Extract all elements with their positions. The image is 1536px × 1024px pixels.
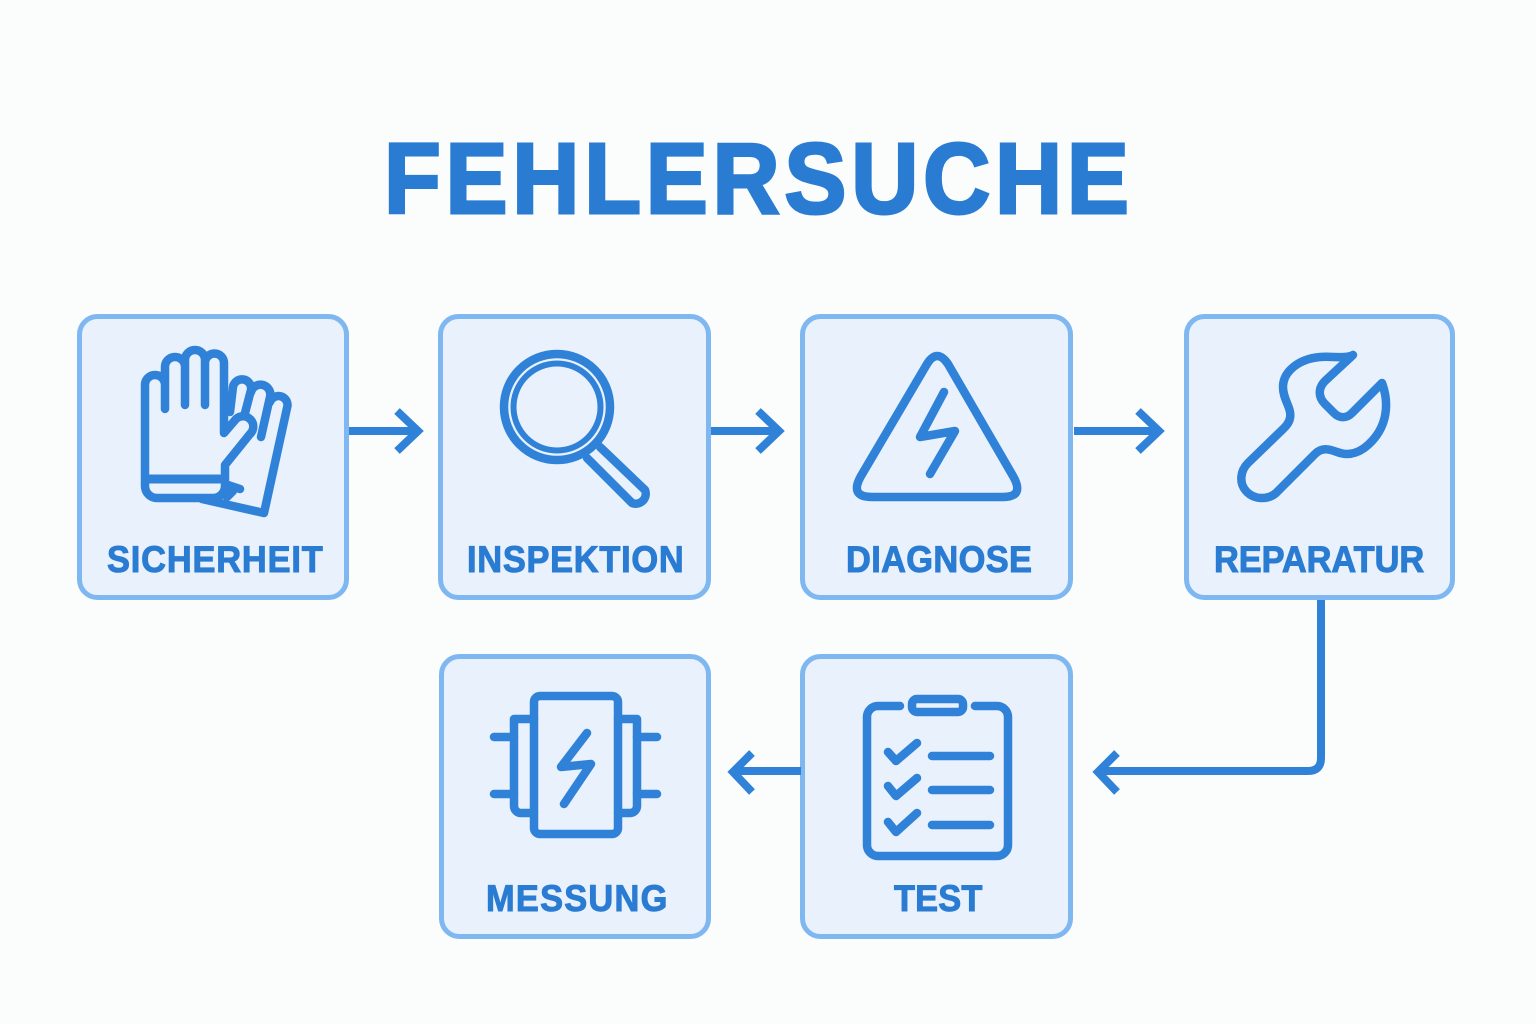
icon: warning triangle [857,356,1017,497]
label: INSPEKTION [467,539,684,580]
panel: Test [802,656,1070,936]
icon: magnifying glass [504,354,646,504]
label: SICHERHEIT [107,539,323,580]
label: REPARATUR [1214,539,1424,580]
panel background [80,316,346,598]
label: DIAGNOSE [846,539,1032,580]
panel: Messung [442,656,708,936]
arrow: Reparatur to Test [1098,600,1321,792]
panel: Diagnose [802,316,1070,598]
panel: Inspektion [440,316,708,598]
panel background [440,316,708,598]
panel background [1186,316,1452,598]
panel: Sicherheit [80,316,346,598]
panel background [442,656,708,936]
arrow: Test to Messung [733,753,801,792]
icon: component with lightning bolt [494,696,657,834]
arrow: Inspektion to Diagnose [711,411,779,451]
icon: wrench [1241,355,1386,498]
icon: gloves [145,350,288,513]
panel background [802,656,1070,936]
panel background [802,316,1070,598]
arrow: Diagnose to Reparatur [1074,411,1159,451]
label: TEST [894,878,983,919]
label: MESSUNG [486,878,667,919]
arrow: Sicherheit to Inspektion [349,411,418,451]
title: FEHLERSUCHE [384,124,1129,235]
panel: Reparatur [1186,316,1452,598]
icon: checklist clipboard [867,699,1008,856]
